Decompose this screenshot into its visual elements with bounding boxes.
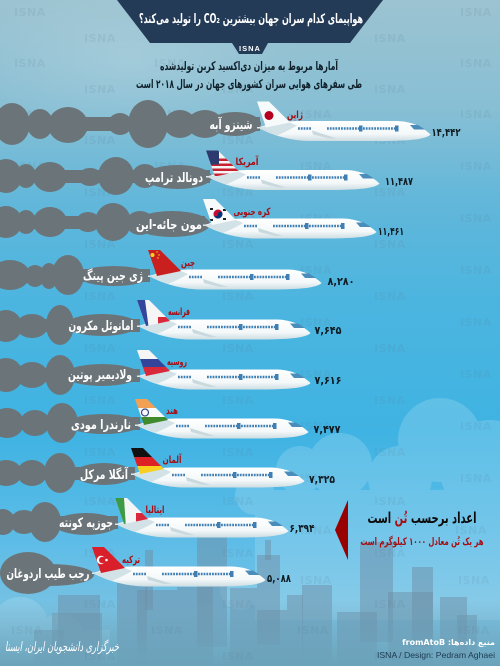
watermarks: ISNA <box>154 264 186 277</box>
watermarks: ISNA <box>84 238 116 251</box>
country labels: آلمان <box>162 453 182 466</box>
watermarks: ISNA <box>460 6 492 19</box>
plane: Japan <box>257 102 430 141</box>
leader names: رجب طیب اردوغان <box>6 567 90 582</box>
watermarks: ISNA <box>14 316 46 329</box>
watermarks: ISNA <box>14 574 46 587</box>
watermarks: ISNA <box>14 160 46 173</box>
watermarks: ISNA <box>151 624 183 637</box>
watermarks: ISNA <box>154 368 186 381</box>
smoke: Erdogan <box>0 552 94 594</box>
values: ۵,۰۸۸ <box>267 572 291 585</box>
watermarks: ISNA <box>84 394 116 407</box>
watermarks: ISNA <box>14 212 46 225</box>
country labels: روسیه <box>167 357 187 368</box>
watermarks: ISNA <box>84 446 116 459</box>
values: ۷,۶۴۵ <box>314 324 342 337</box>
watermarks: ISNA <box>222 83 254 96</box>
watermarks: ISNA <box>374 547 406 560</box>
smoke: Macron <box>0 305 140 345</box>
watermarks: ISNA <box>374 238 406 251</box>
values: ۱۱,۴۶۱ <box>378 225 404 238</box>
watermarks: ISNA <box>374 186 406 199</box>
watermarks: ISNA <box>300 368 332 381</box>
title: هواپیمای کدام سران جهان بیشترین CO₂ را تولید می‌کند؟ <box>139 12 363 27</box>
watermarks: ISNA <box>14 264 46 277</box>
watermarks: ISNA <box>222 650 254 663</box>
watermarks: ISNA <box>374 83 406 96</box>
watermarks: ISNA <box>84 598 116 611</box>
watermarks: ISNA <box>460 212 492 225</box>
callout text <box>360 509 484 548</box>
watermarks: ISNA <box>374 134 406 147</box>
watermarks: ISNA <box>222 186 254 199</box>
watermarks: ISNA <box>460 108 492 121</box>
watermarks: ISNA <box>84 342 116 355</box>
watermarks: ISNA <box>14 472 46 485</box>
plane: South Korea <box>203 199 376 238</box>
callout arrow <box>335 500 348 560</box>
subtitle: طی سفرهای هوایی سران کشورهای جهان در سال ۲۰۱۸ است <box>136 77 362 92</box>
smoke trails <box>0 100 261 594</box>
plane: Turkey <box>92 547 266 586</box>
leader names: دونالد ترامپ <box>145 171 203 186</box>
watermarks: ISNA <box>14 524 46 537</box>
watermarks: ISNA <box>222 495 254 508</box>
watermarks: ISNA <box>154 574 186 587</box>
smoke: Abe <box>0 100 261 148</box>
smoke: Modi <box>0 403 141 443</box>
watermarks: ISNA <box>374 394 406 407</box>
values: ۱۱,۴۸۷ <box>385 175 413 188</box>
watermarks: ISNA <box>300 212 332 225</box>
watermarks: ISNA <box>84 134 116 147</box>
watermarks: ISNA <box>14 368 46 381</box>
watermarks: ISNA <box>222 342 254 355</box>
ground haze <box>0 600 500 666</box>
leader names: ولادیمیر پوتین <box>68 368 132 383</box>
watermarks: ISNA <box>300 524 332 537</box>
values: ۷,۶۱۶ <box>314 374 342 387</box>
watermarks: ISNA <box>84 83 116 96</box>
watermarks: ISNA <box>374 32 406 45</box>
watermarks: ISNA <box>154 57 186 70</box>
watermarks: ISNA <box>14 108 46 121</box>
values: ۱۴,۴۴۲ <box>432 126 461 139</box>
leader names: آنگلا مرکل <box>80 466 128 483</box>
watermarks: ISNA <box>455 524 487 537</box>
leader names: امانوئل مکرون <box>68 319 134 334</box>
watermarks: ISNA <box>154 212 186 225</box>
credits: ISNA / Design: Pedram Aghaei <box>377 650 495 660</box>
watermarks: ISNA <box>458 624 490 637</box>
watermarks: ISNA <box>300 108 332 121</box>
watermarks: ISNA <box>154 524 186 537</box>
leader names <box>6 116 252 582</box>
smoke: Trump <box>0 157 212 195</box>
leader names: مون جائه-این <box>136 218 202 233</box>
watermarks: ISNA <box>300 420 332 433</box>
background clouds <box>0 398 500 666</box>
leader names: شینزو آبه <box>210 116 252 133</box>
country labels: ژاپن <box>287 110 303 121</box>
leader names: نارندرا مودی <box>71 418 131 433</box>
watermarks: ISNA <box>154 316 186 329</box>
country labels: کره جنوبی <box>234 207 271 218</box>
watermarks: ISNA <box>374 650 406 663</box>
watermarks: ISNA <box>374 342 406 355</box>
watermarks: ISNA <box>374 495 406 508</box>
watermarks: ISNA <box>154 472 186 485</box>
watermarks: ISNA <box>374 446 406 459</box>
watermarks: ISNA <box>460 316 492 329</box>
watermarks: ISNA <box>154 108 186 121</box>
watermarks: ISNA <box>11 624 43 637</box>
watermarks: ISNA <box>222 547 254 560</box>
watermarks: ISNA <box>84 495 116 508</box>
smoke: Putin <box>0 355 140 395</box>
watermarks: ISNA <box>374 598 406 611</box>
watermarks: ISNA <box>460 160 492 173</box>
watermarks: ISNA <box>300 264 332 277</box>
watermarks: ISNA <box>84 186 116 199</box>
leader names: ژی جین پینگ <box>83 268 143 284</box>
credits <box>377 638 495 660</box>
ISNA tab: ISNA <box>239 44 261 53</box>
credits: منبع داده‌ها: fromAtoB <box>402 638 495 647</box>
watermarks: ISNA <box>222 290 254 303</box>
smoke: Moon <box>0 203 210 241</box>
values: ۸,۲۸۰ <box>328 275 354 288</box>
watermarks: ISNA <box>14 6 46 19</box>
country labels: فرانسه <box>168 307 190 318</box>
plane: Germany <box>131 448 304 488</box>
subtitle: آمارها مربوط به میزان دی‌اکسید کربن تولیدشده <box>160 58 339 74</box>
watermarks: ISNA <box>222 598 254 611</box>
watermarks: ISNA <box>460 472 492 485</box>
plane: India <box>135 399 308 438</box>
watermarks: ISNA <box>84 547 116 560</box>
watermarks: ISNA <box>84 650 116 663</box>
news agency logo text: خبرگزاری دانشجویان ایران، ایسنا <box>5 639 120 655</box>
watermarks: ISNA <box>222 446 254 459</box>
smoke: Conte <box>0 502 118 542</box>
watermarks: ISNA <box>222 238 254 251</box>
plane: USA <box>206 150 380 190</box>
country labels: هند <box>166 406 178 417</box>
watermarks: ISNA <box>300 160 332 173</box>
watermarks: ISNA <box>460 57 492 70</box>
header banner <box>117 0 383 43</box>
watermarks: ISNA <box>460 264 492 277</box>
watermarks: ISNA <box>154 160 186 173</box>
subtitle <box>136 58 362 92</box>
watermarks: ISNA <box>300 472 332 485</box>
plane: France <box>137 300 310 340</box>
watermarks: ISNA <box>154 420 186 433</box>
watermarks: ISNA <box>297 624 329 637</box>
watermarks: ISNA <box>84 32 116 45</box>
values: ۶,۳۹۴ <box>290 522 315 535</box>
country labels: چین <box>181 258 195 269</box>
smoke: Xi <box>0 255 150 295</box>
country labels <box>122 110 303 566</box>
values <box>267 126 461 585</box>
country labels: آمریکا <box>236 155 259 168</box>
watermarks: ISNA <box>222 394 254 407</box>
plane: Russia <box>137 350 310 390</box>
watermarks: ISNA <box>222 134 254 147</box>
plane: Italy <box>115 498 288 538</box>
city skyline <box>34 537 477 666</box>
smoke: Merkel <box>0 453 135 493</box>
leader names: جوزپه کونته <box>59 516 113 531</box>
watermarks: ISNA <box>300 316 332 329</box>
ISNA tab <box>232 43 268 54</box>
country labels: ایتالیا <box>146 505 164 516</box>
watermarks: ISNA <box>84 290 116 303</box>
values: ۷,۳۲۵ <box>309 473 335 486</box>
watermarks: ISNA <box>14 57 46 70</box>
watermarks: ISNA <box>460 420 492 433</box>
values: ۷,۴۷۷ <box>314 423 341 436</box>
watermarks: ISNA <box>458 574 490 587</box>
watermarks: ISNA <box>460 368 492 381</box>
watermarks: ISNA <box>374 290 406 303</box>
watermarks: ISNA <box>300 574 332 587</box>
country labels: ترکیه <box>122 555 140 566</box>
plane: China <box>148 250 322 290</box>
watermarks: ISNA <box>14 420 46 433</box>
